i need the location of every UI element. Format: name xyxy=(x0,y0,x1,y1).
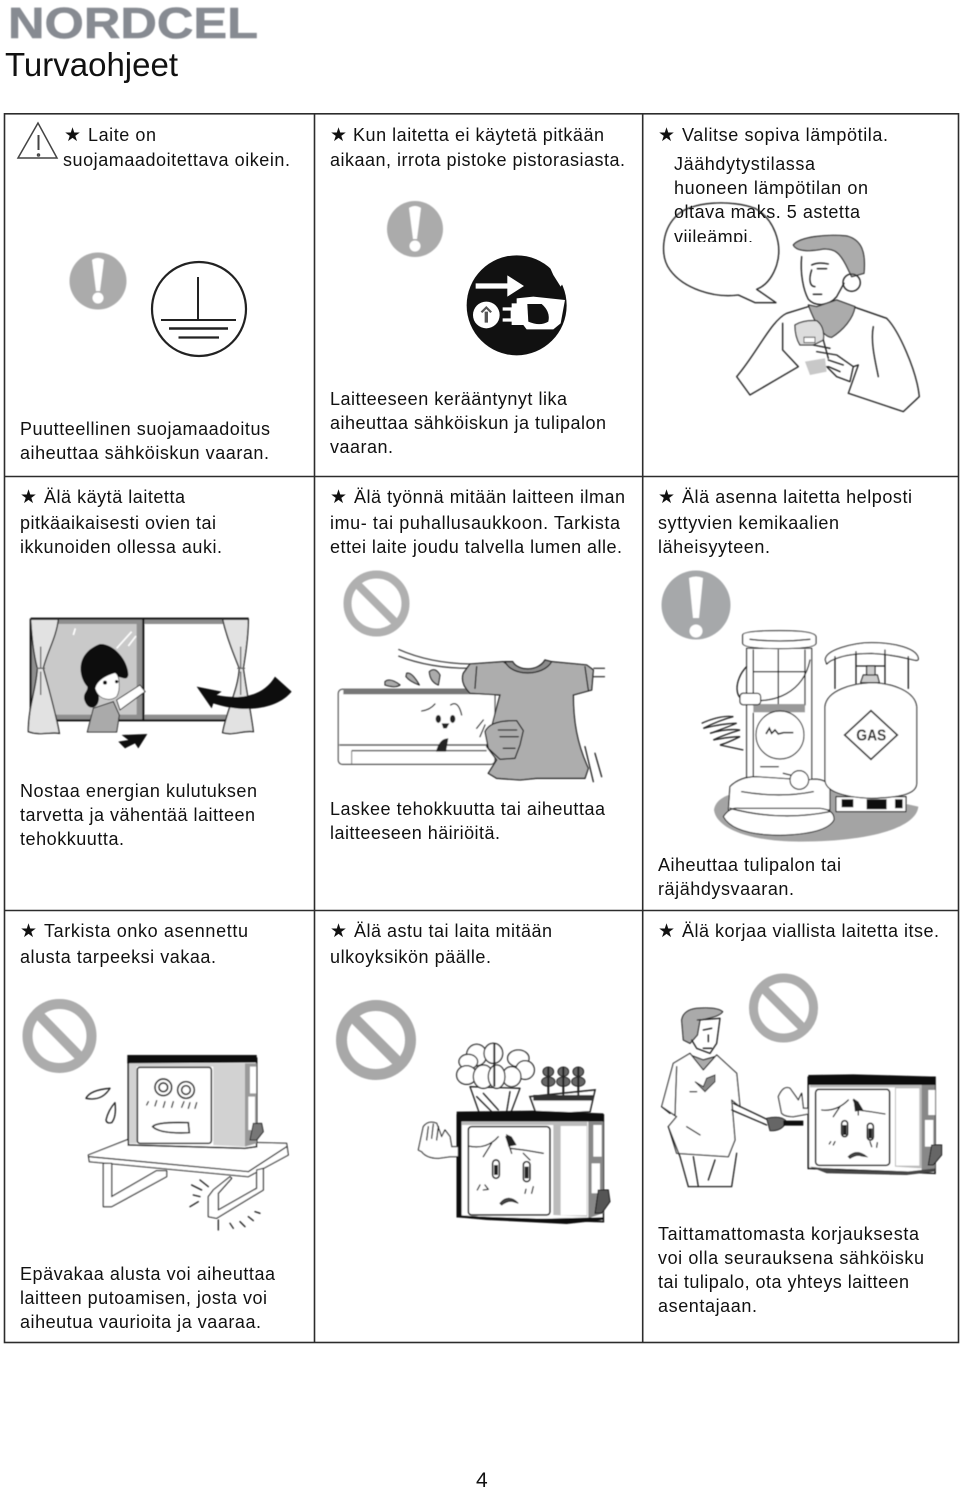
unit xyxy=(808,1074,942,1175)
icon: exclamation xyxy=(662,570,730,640)
caption: earthing: Puutteellinen suojamaadoitus xyxy=(20,419,270,439)
heading: stable base: ★ xyxy=(20,921,37,942)
caption: windows: Nostaa energian kulutuksen xyxy=(20,781,257,801)
icon: exclamation xyxy=(70,252,126,310)
text in clipped box: huoneen lämpötilan on xyxy=(674,178,868,198)
indoor unit xyxy=(338,670,495,764)
girl xyxy=(81,644,145,732)
heading: windows: Älä käytä laitetta xyxy=(44,487,186,507)
shelf xyxy=(88,1139,288,1230)
icon: prohibited xyxy=(348,574,406,632)
illustration: heater and gas bottle xyxy=(702,631,918,842)
caption: air openings: laitteeseen häiriöitä. xyxy=(330,823,500,843)
heading: flammable: ★ xyxy=(658,487,675,508)
shirt xyxy=(398,649,605,782)
caption: flammable: räjähdysvaaran. xyxy=(658,879,794,899)
icon: earth symbol xyxy=(152,262,246,356)
heading: temperature: Valitse sopiva lämpötila. xyxy=(682,125,888,145)
text in clipped box xyxy=(674,154,868,247)
illustration: man with remote and speech bubble xyxy=(664,203,919,412)
heading: windows: pitkäaikaisesti ovien tai xyxy=(20,513,216,533)
heading: air openings xyxy=(330,487,625,557)
heading: stable base xyxy=(20,921,248,967)
heading: air openings: ★ xyxy=(330,487,347,508)
text in clipped box: viileämpi. xyxy=(674,227,753,247)
heading: earthing xyxy=(63,125,290,170)
text in clipped box: oltava maks. 5 astetta xyxy=(674,202,861,222)
caption: unplug: vaaran. xyxy=(330,437,393,457)
illustration: man repairing outdoor unit xyxy=(662,1008,942,1187)
caption: air openings: Laskee tehokkuutta tai aiheuttaa xyxy=(330,799,606,819)
panel: temperature xyxy=(658,125,919,412)
window xyxy=(31,619,249,720)
heater xyxy=(702,631,834,835)
caption: stable base: aiheutua vaurioita ja vaaraa. xyxy=(20,1312,261,1332)
man xyxy=(662,1008,803,1187)
heading: unplug xyxy=(330,125,625,170)
heading: earthing: ★ xyxy=(64,125,81,146)
panel: unplug xyxy=(330,125,625,457)
panel: stable base xyxy=(20,921,288,1332)
caption: stable base: laitteen putoamisen, josta voi xyxy=(20,1288,267,1308)
caption: unplug: aiheuttaa sähköiskun ja tulipalon xyxy=(330,413,606,433)
caption: earthing: aiheuttaa sähköiskun vaaran. xyxy=(20,443,269,463)
heading: stable base: alusta tarpeeksi vakaa. xyxy=(20,947,216,967)
hand xyxy=(778,1088,808,1117)
heading: earthing: suojamaadoitettava oikein. xyxy=(63,150,290,170)
heading: air openings: imu- tai puhallusaukkoon. Tarkista xyxy=(330,513,621,533)
text in clipped box: Jäähdytystilassa xyxy=(674,154,816,174)
speech bubble xyxy=(664,203,779,303)
heading: unplug: aikaan, irrota pistoke pistorasiasta. xyxy=(330,150,625,170)
heading: do not step xyxy=(330,921,552,967)
heading: do not step: ★ xyxy=(330,921,347,942)
title: Turvaohjeet xyxy=(5,46,178,83)
caption: unplug xyxy=(330,389,606,457)
heading: windows: ★ xyxy=(20,487,37,508)
heading: earthing: Laite on xyxy=(88,125,156,145)
panel: earthing xyxy=(18,123,290,463)
caption: do not repair: tai tulipalo, ota yhteys laitteen xyxy=(658,1272,909,1292)
heading: flammable: syttyvien kemikaalien xyxy=(658,513,839,533)
heading: stable base: Tarkista onko asennettu xyxy=(44,921,248,941)
caption: do not repair: asentajaan. xyxy=(658,1296,757,1316)
caption: stable base xyxy=(20,1264,276,1332)
arrows xyxy=(197,677,292,709)
panel: flammable xyxy=(658,487,918,899)
icon: prohibited xyxy=(342,1006,410,1074)
illustration: outdoor unit on unstable shelf xyxy=(86,1055,288,1230)
unit xyxy=(86,1055,263,1148)
heading: flammable: Älä asenna laitetta helposti xyxy=(682,487,912,507)
icon: prohibited xyxy=(754,978,814,1038)
caption: flammable: Aiheuttaa tulipalon tai xyxy=(658,855,841,875)
caption: windows xyxy=(20,781,257,849)
illustration: shirt over indoor unit xyxy=(338,649,605,782)
heading: do not step: Älä astu tai laita mitään xyxy=(354,921,552,941)
heading: flammable: läheisyyteen. xyxy=(658,537,770,557)
caption: unplug: Laitteeseen kerääntynyt lika xyxy=(330,389,568,409)
heading: unplug: Kun laitetta ei käytetä pitkään xyxy=(353,125,604,145)
panel: do not step xyxy=(330,921,610,1224)
logo: NORDCEL: NORDCEL xyxy=(8,0,258,48)
plants xyxy=(457,1043,595,1115)
heading: air openings: ettei laite joudu talvella lumen alle. xyxy=(330,537,622,557)
caption: windows: tarvetta ja vähentää laitteen xyxy=(20,805,255,825)
page number: 4 xyxy=(476,1469,488,1492)
illustration: sad outdoor unit with plants xyxy=(418,1043,610,1224)
illustration: open window, girl and airflow arrow xyxy=(28,619,292,748)
icon: unplug xyxy=(467,253,573,355)
heading: do not repair: ★ xyxy=(658,921,675,942)
caption: do not repair: Taittamattomasta korjauksesta xyxy=(658,1224,920,1244)
gas bottle: GAS xyxy=(856,727,887,744)
heading: air openings: Älä työnnä mitään laitteen ilman xyxy=(354,487,625,507)
icon: prohibited xyxy=(28,1004,92,1068)
hand xyxy=(418,1122,458,1158)
caption: air openings xyxy=(330,799,606,843)
heading: windows xyxy=(20,487,222,557)
heading: unplug: ★ xyxy=(330,125,347,146)
heading: windows: ikkunoiden ollessa auki. xyxy=(20,537,222,557)
heading: flammable xyxy=(658,487,912,557)
icon: exclamation xyxy=(387,201,443,257)
heading: temperature: ★ xyxy=(658,125,675,146)
man xyxy=(737,235,919,412)
caption: flammable xyxy=(658,855,841,899)
curtains xyxy=(28,619,253,734)
panel: do not repair xyxy=(658,921,942,1316)
caption: earthing xyxy=(20,419,270,463)
unit xyxy=(457,1111,610,1224)
gas bottle xyxy=(825,643,918,812)
caption: do not repair xyxy=(658,1224,924,1316)
panel: windows xyxy=(20,487,292,849)
caption: do not repair: voi olla seurauksena sähköisku xyxy=(658,1248,924,1268)
caption: windows: tehokkuutta. xyxy=(20,829,124,849)
heading: do not step: ulkoyksikön päälle. xyxy=(330,947,491,967)
icon: warning triangle xyxy=(18,123,57,158)
panel: air openings xyxy=(330,487,625,843)
caption: stable base: Epävakaa alusta voi aiheuttaa xyxy=(20,1264,276,1284)
heading: do not repair: Älä korjaa viallista laitetta itse. xyxy=(682,921,939,941)
